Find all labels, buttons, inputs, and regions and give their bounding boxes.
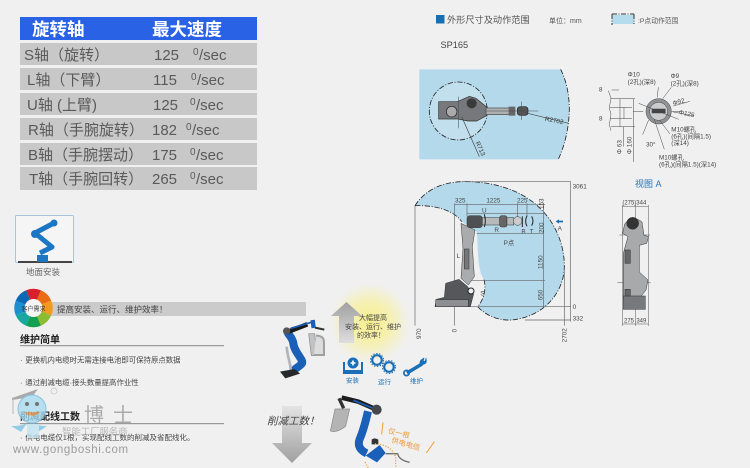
top view drawing: R2702	[544, 116, 564, 126]
side view drawing: 650	[537, 289, 544, 300]
view A heading: 视图 A	[635, 178, 662, 189]
side view drawing: A	[558, 225, 563, 232]
row: S axis: S轴（旋转）	[24, 47, 109, 64]
side view drawing	[415, 182, 587, 342]
watermark: www.gongboshi.com	[12, 444, 129, 456]
wrist flange drawing: M10螺孔	[659, 152, 685, 161]
row: R axis: 0	[186, 122, 192, 133]
wrist flange drawing: Φ92	[672, 97, 686, 107]
view A drawing: (275)344	[622, 201, 647, 207]
speed table	[20, 17, 257, 190]
row: B axis	[20, 143, 257, 165]
side view drawing: 1150	[537, 255, 544, 269]
row: L axis: L轴（下臂）	[27, 72, 110, 89]
section: reduced wiring: 削减配线工数	[20, 410, 80, 423]
section: reduced wiring: 供电电缆仅1根，实现配线工数的削减及省配线化。	[25, 432, 194, 442]
section: reduced wiring: ·	[20, 433, 22, 442]
glow callout: greatly improved efficiency: 安装、运行、维护	[345, 322, 401, 331]
side view drawing: U	[482, 208, 487, 215]
wrist flange drawing: 8	[599, 116, 603, 123]
robot image: lower with cable	[330, 398, 434, 468]
wrist flange drawing: (深14)	[671, 138, 689, 147]
row: L axis: 0	[191, 72, 197, 83]
side view drawing: 200	[539, 222, 546, 233]
row: L axis: 115	[153, 72, 177, 89]
wrist flange drawing: (6孔)(间隔1.5)(深14)	[659, 159, 716, 168]
side view drawing: 0	[573, 304, 577, 311]
row: U axis: 125	[153, 97, 178, 114]
row: B axis: 0	[190, 147, 196, 158]
section: easy maintenance: ·	[20, 378, 22, 387]
row: S axis	[20, 43, 257, 65]
view A drawing	[617, 201, 651, 326]
wrist flange drawing: 8	[599, 86, 603, 93]
dimension legend: 单位：mm	[549, 16, 582, 25]
robot plan	[439, 96, 487, 121]
wrist flange drawing: M10螺孔	[671, 125, 697, 134]
icon: operation gears	[370, 353, 396, 386]
glow callout: greatly improved efficiency: 的效率！	[357, 330, 385, 340]
glow callout: greatly improved efficiency: 大幅提高	[359, 313, 387, 322]
row: T axis: /sec	[196, 171, 224, 188]
section: easy maintenance: 通过削减电缆·接头数量提高作业性	[25, 378, 139, 387]
robot side	[435, 216, 522, 307]
side view drawing: 1225	[486, 197, 501, 204]
top view drawing	[419, 69, 569, 159]
range area	[415, 182, 564, 320]
row: R axis: /sec	[192, 122, 220, 139]
section: easy maintenance: 维护简单	[20, 333, 60, 346]
dimension legend: 外形尺寸及动作范围	[447, 14, 530, 25]
side view drawing: S	[480, 291, 485, 298]
row: T axis: T轴（手腕回转）	[29, 171, 143, 188]
range area	[419, 69, 569, 159]
robot image: lower with cable: 仅一根	[387, 426, 411, 440]
row: T axis	[20, 167, 257, 190]
row: T axis: 265	[152, 171, 177, 188]
side view drawing: 970	[416, 328, 423, 339]
dimension legend	[436, 14, 679, 25]
robot image: upper	[280, 320, 324, 378]
wrist flange drawing: Φ 160	[626, 136, 633, 154]
side view drawing: L	[457, 253, 461, 260]
row: B axis: B轴（手腕摆动）	[28, 147, 143, 164]
table header: 旋转轴	[32, 20, 84, 40]
arrow: up	[331, 302, 362, 343]
wrist flange drawing: Φ10	[628, 72, 640, 79]
view A drawing: 349	[636, 319, 647, 325]
row: B axis: 175	[152, 147, 177, 164]
section: reduced wiring	[20, 410, 224, 442]
side view drawing: 3061	[573, 184, 587, 191]
demand banner	[20, 294, 306, 322]
icon: installation	[343, 358, 363, 384]
watermark: 智能工厂服务商	[62, 426, 128, 437]
top view drawing: R713	[474, 141, 486, 158]
table header: 最大速度	[152, 20, 222, 40]
icon: installation: 安装	[346, 376, 360, 384]
side view drawing: 0	[452, 328, 459, 332]
row: B axis: /sec	[196, 147, 224, 164]
wrist flange drawing	[599, 72, 716, 168]
callout: reduced work	[267, 406, 320, 463]
glow callout: greatly improved efficiency	[330, 283, 410, 363]
demand banner: 提高安装、运行、维护效率！	[57, 304, 168, 314]
side view drawing: T	[530, 228, 534, 235]
legend: P point range: :P点动作范围	[638, 16, 679, 25]
row: L axis	[20, 68, 257, 90]
row: R axis: R轴（手腕旋转）	[28, 122, 144, 139]
wrist flange drawing: Φ 63	[616, 140, 623, 154]
row: U axis: U轴 (上臂)	[27, 97, 97, 114]
arrow: view A	[556, 219, 563, 224]
wrist flange drawing: 30°	[646, 141, 656, 149]
side view drawing: 2702	[561, 328, 568, 342]
row: L axis: /sec	[197, 72, 225, 89]
row: R axis	[20, 118, 257, 140]
callout: reduced work: 削减工数！	[267, 416, 320, 428]
row: R axis: 182	[152, 122, 177, 139]
row: S axis: 0	[193, 47, 199, 58]
wrist flange drawing: Φ125	[678, 109, 695, 119]
side view drawing: 153	[539, 198, 546, 209]
icon: customer needs colour wheel	[20, 294, 47, 322]
table header	[20, 17, 257, 40]
watermark	[11, 388, 142, 456]
section: easy maintenance: 更换机内电缆时无需连接电池即可保持原点数据	[25, 356, 181, 364]
row: T axis: 0	[190, 171, 196, 182]
side view drawing: R	[494, 227, 499, 234]
wrist flange drawing: (2孔)(深8)	[671, 78, 699, 87]
dimension lines	[415, 182, 571, 326]
side view drawing: B	[521, 228, 526, 235]
section: easy maintenance: ·	[20, 356, 22, 364]
row: U axis: 0	[190, 97, 196, 108]
arrow: down	[272, 406, 312, 463]
row: U axis	[20, 93, 257, 115]
watermark: 博士	[84, 404, 142, 427]
wrist flange drawing: (6孔)(间隔1.5)	[671, 131, 711, 140]
row: S axis: /sec	[199, 47, 227, 64]
icon: maintenance wrench: 维护	[410, 376, 423, 385]
view A drawing: 275	[624, 319, 635, 325]
icon: maintenance wrench	[404, 358, 426, 385]
legend: P point range	[612, 14, 679, 25]
side view drawing: 225	[517, 197, 528, 204]
side view drawing: 332	[573, 315, 584, 322]
row: S axis: 125	[154, 47, 179, 64]
section: easy maintenance	[20, 333, 224, 387]
robot image: lower with cable: 供电电缆	[390, 436, 422, 453]
icon: operation gears: 运行	[378, 377, 392, 386]
icon: floor mounting robot	[16, 216, 74, 262]
floor mounting label: 地面安装	[26, 267, 61, 277]
demand banner: 客户需求	[22, 305, 46, 313]
watermark mascot	[11, 389, 47, 438]
side view drawing: P点	[504, 239, 515, 247]
wrist flange drawing: Φ9	[671, 73, 680, 80]
row: U axis: /sec	[196, 97, 224, 114]
wrist flange drawing: (2孔)(深8)	[628, 77, 656, 86]
side view drawing: 325	[455, 197, 466, 204]
model name: SP165	[440, 40, 468, 50]
